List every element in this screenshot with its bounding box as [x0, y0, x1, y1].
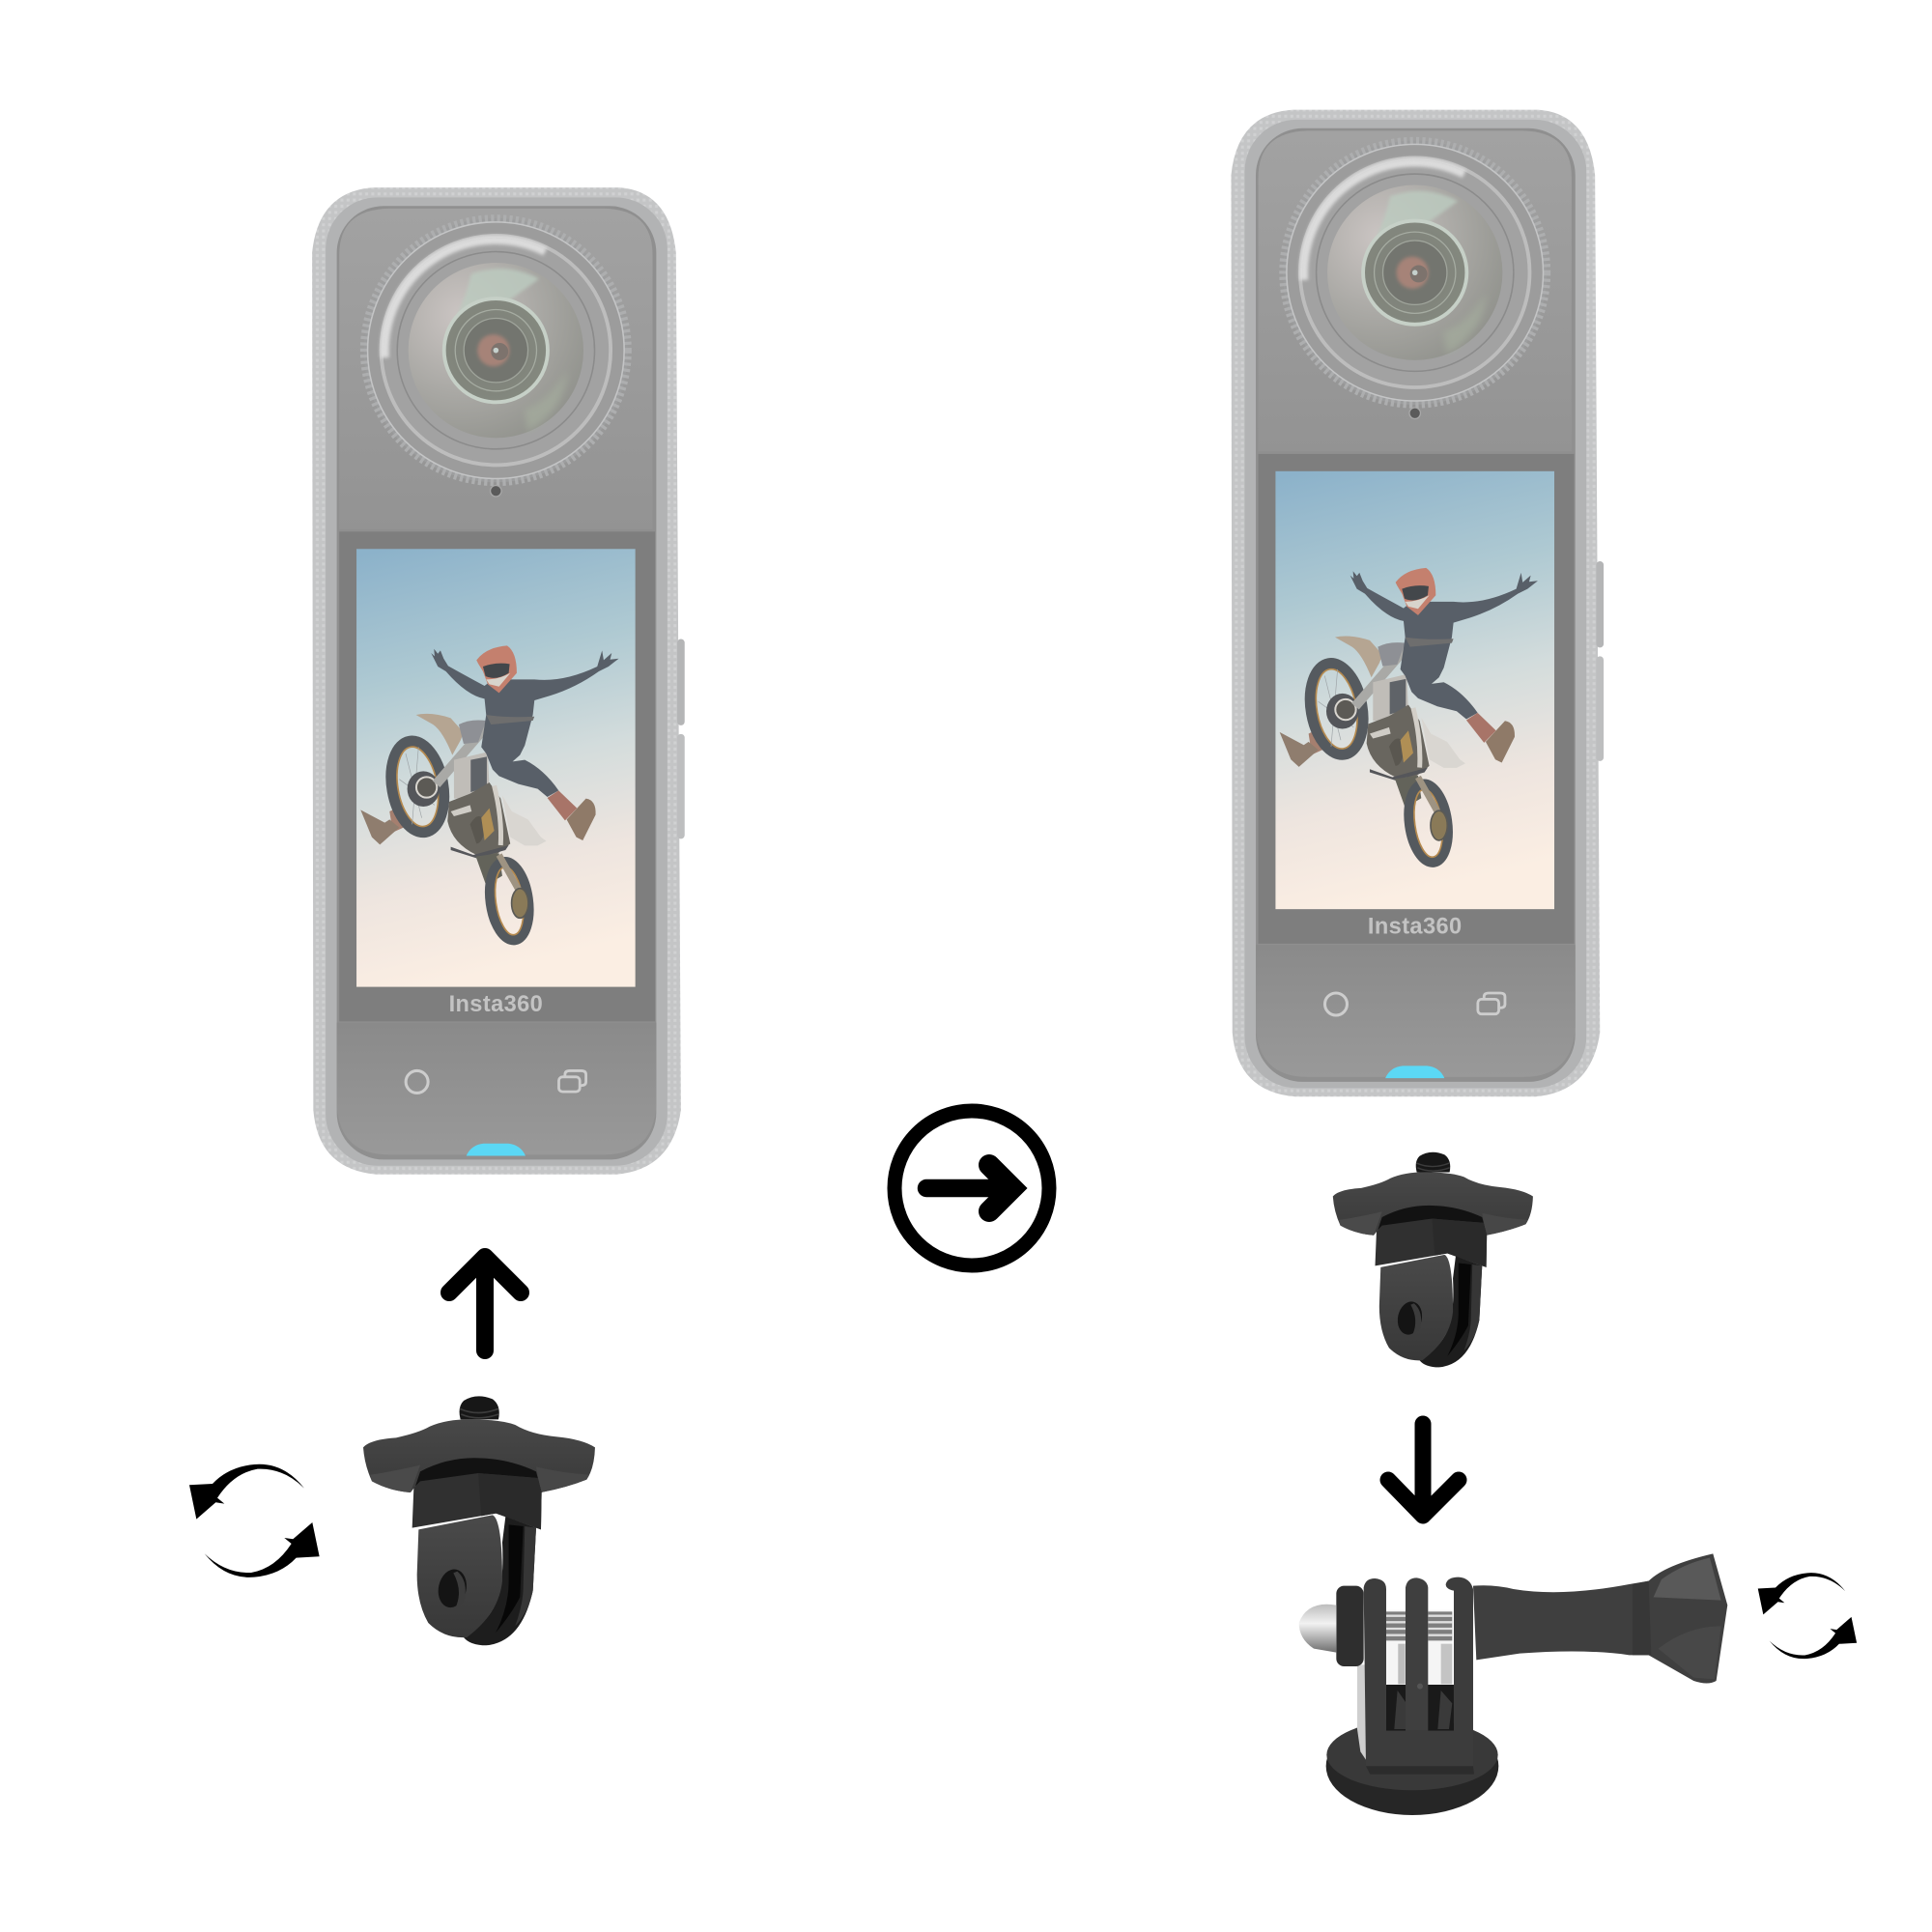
panel: camera, step one: Insta360 [449, 992, 543, 1017]
panel: camera, step two: Insta360 [1368, 915, 1463, 940]
panel: camera, step one [312, 187, 685, 1175]
icon: rotate arrows, step one [189, 1464, 320, 1577]
panel: camera, step two [1231, 110, 1604, 1096]
arrow: up to camera [449, 1257, 521, 1350]
icon: adapter, step two [1333, 1152, 1533, 1367]
arrow: down to mount [1388, 1424, 1459, 1516]
icon: thumbscrew mount [1299, 1553, 1727, 1815]
icon: rotate arrows, thumbscrew [1758, 1573, 1857, 1659]
icon: next step arrow in circle [895, 1111, 1049, 1265]
icon: adapter, step one [363, 1396, 595, 1645]
